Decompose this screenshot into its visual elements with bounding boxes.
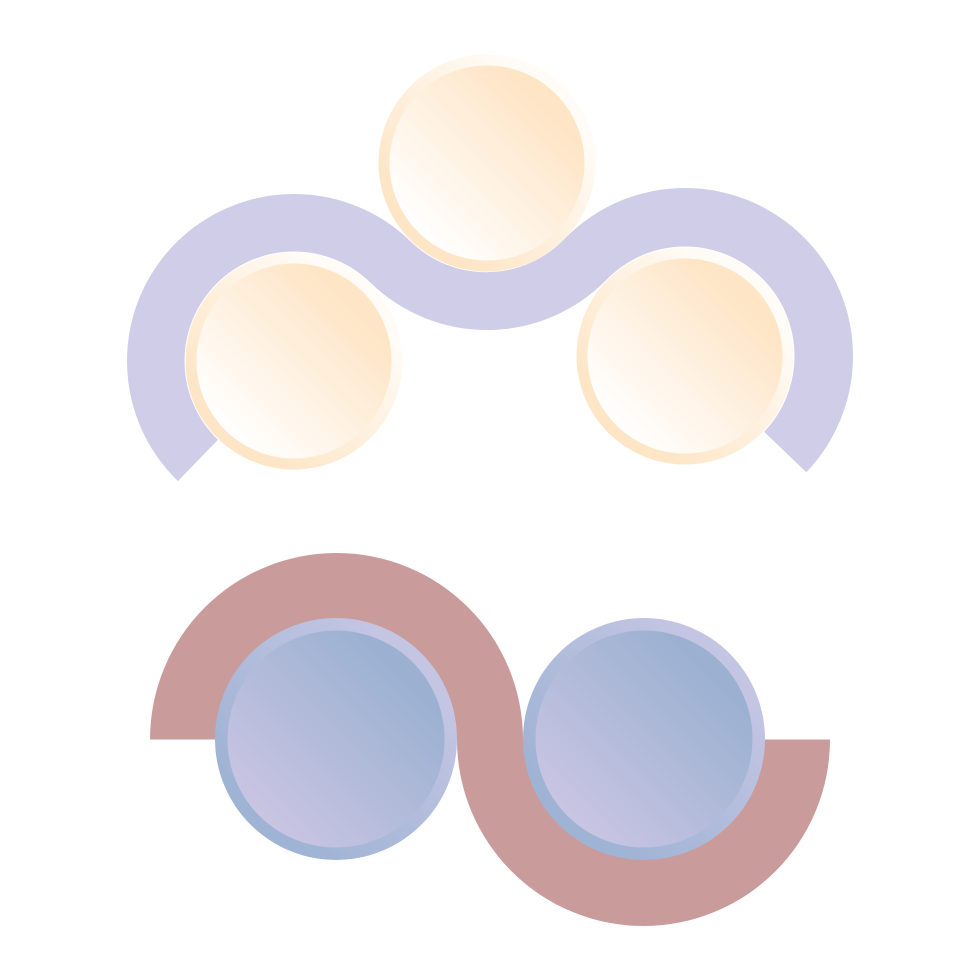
right blue circle xyxy=(523,618,765,860)
rose S-shaped band xyxy=(150,553,830,926)
top group: lavender band with three peach circles xyxy=(127,54,853,481)
left blue circle xyxy=(215,618,457,860)
top peach circle xyxy=(378,54,596,272)
left peach circle xyxy=(186,252,402,470)
bottom group: rose band with two blue circles xyxy=(150,553,830,926)
right peach circle xyxy=(576,248,794,464)
lavender wave band xyxy=(127,188,853,481)
